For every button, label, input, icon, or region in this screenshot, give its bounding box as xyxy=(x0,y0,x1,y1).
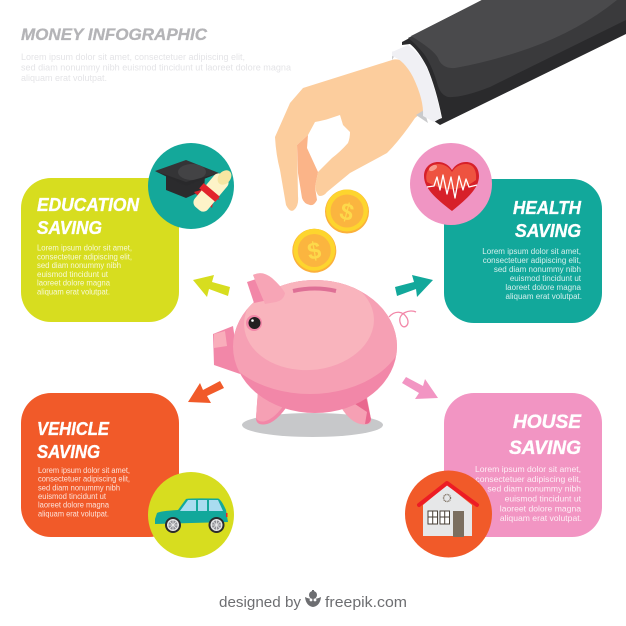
coin lower: $ xyxy=(305,237,324,266)
pig tail xyxy=(389,311,416,327)
education body text: aliquam erat volutpat. xyxy=(37,287,110,296)
coin lower xyxy=(292,229,336,273)
intro text block xyxy=(21,52,291,83)
house heading: HOUSE xyxy=(513,412,582,433)
house body text: aliquam erat volutpat. xyxy=(500,513,582,523)
footer credit: designed by xyxy=(219,595,302,611)
pig ear xyxy=(247,273,285,304)
footer credit xyxy=(219,590,407,611)
icon: graduation cap and diploma xyxy=(148,143,234,229)
sleeve xyxy=(402,0,626,125)
education heading xyxy=(37,195,140,238)
pig legs xyxy=(256,390,371,425)
health body text: consectetuer adipiscing elit, xyxy=(483,256,581,265)
hand xyxy=(275,59,425,211)
intro text block: aliquam erat volutpat. xyxy=(21,73,107,83)
footer credit: freepik.com xyxy=(325,595,407,611)
education body text: Lorem ipsum dolor sit amet, xyxy=(37,244,132,252)
pig snout xyxy=(213,326,240,374)
panel: vehicle saving xyxy=(21,393,179,537)
vehicle body text: consectetuer adipiscing elit, xyxy=(38,475,130,484)
house body text: consectetuer adipiscing elit, xyxy=(475,474,581,484)
education body text xyxy=(37,244,132,296)
education body text: consectetuer adipiscing elit, xyxy=(37,252,132,261)
vehicle body text: aliquam erat volutpat. xyxy=(38,509,109,518)
pig coin slot xyxy=(293,288,336,291)
house body text: Lorem ipsum dolor sit amet, xyxy=(475,464,581,474)
vehicle body text: Lorem ipsum dolor sit amet, xyxy=(38,466,130,475)
vehicle body text: euismod tincidunt ut xyxy=(38,492,107,501)
panel: health saving xyxy=(444,179,602,323)
vehicle heading xyxy=(37,419,110,462)
arrow: to health xyxy=(395,275,433,297)
vehicle body text xyxy=(38,466,130,518)
house heading xyxy=(509,412,582,459)
shirt cuff xyxy=(392,45,441,123)
health body text: aliquam erat volutpat. xyxy=(506,292,582,301)
intro text block: sed diam nonummy nibh euismod tincidunt ut laoreet dolore magna xyxy=(21,62,291,72)
vehicle heading: SAVING xyxy=(37,442,100,462)
health body text: laoreet dolore magna xyxy=(505,283,582,292)
health body text: Lorem ipsum dolor sit amet, xyxy=(482,247,581,256)
pig shadow xyxy=(242,413,383,437)
icon: car xyxy=(148,472,234,558)
icon: house xyxy=(405,470,492,558)
house body text xyxy=(475,464,582,523)
vehicle body text: laoreet dolore magna xyxy=(38,501,110,510)
education heading: SAVING xyxy=(37,218,102,238)
hand: fingertip shadow xyxy=(297,135,318,205)
vehicle body text: sed diam nonummy nibh xyxy=(38,483,120,492)
piggy bank xyxy=(213,262,416,437)
education body text: euismod tincidunt ut xyxy=(37,270,109,279)
icon: heart with pulse xyxy=(410,143,492,225)
health heading: HEALTH xyxy=(513,198,582,218)
health body text: sed diam nonummy nibh xyxy=(494,265,581,274)
house body text: euismod tincidunt ut xyxy=(505,494,582,504)
intro text block: Lorem ipsum dolor sit amet, consectetuer adipiscing elit, xyxy=(21,52,245,62)
icon: freepik logo xyxy=(305,590,321,607)
health heading: SAVING xyxy=(515,221,581,241)
arrow: to house xyxy=(402,377,438,399)
house body text: laoreet dolore magna xyxy=(500,503,581,513)
panel: house saving xyxy=(444,393,602,537)
education body text: sed diam nonummy nibh xyxy=(37,261,121,270)
health body text: euismod tincidunt ut xyxy=(510,274,582,283)
house heading: SAVING xyxy=(509,438,581,459)
title: MONEY INFOGRAPHIC xyxy=(21,25,208,44)
coin upper xyxy=(325,190,369,234)
pig eye xyxy=(246,315,262,331)
pig body xyxy=(233,280,397,413)
health body text xyxy=(482,247,582,301)
education body text: laoreet dolore magna xyxy=(37,278,111,288)
vehicle heading: VEHICLE xyxy=(37,419,110,439)
coin upper: $ xyxy=(337,198,357,227)
arrow: to vehicle xyxy=(188,381,224,403)
arrow: to education xyxy=(193,275,230,297)
panel: education saving xyxy=(21,178,179,322)
health heading xyxy=(513,198,582,241)
education heading: EDUCATION xyxy=(37,195,140,215)
house body text: sed diam nonummy nibh xyxy=(487,484,581,494)
